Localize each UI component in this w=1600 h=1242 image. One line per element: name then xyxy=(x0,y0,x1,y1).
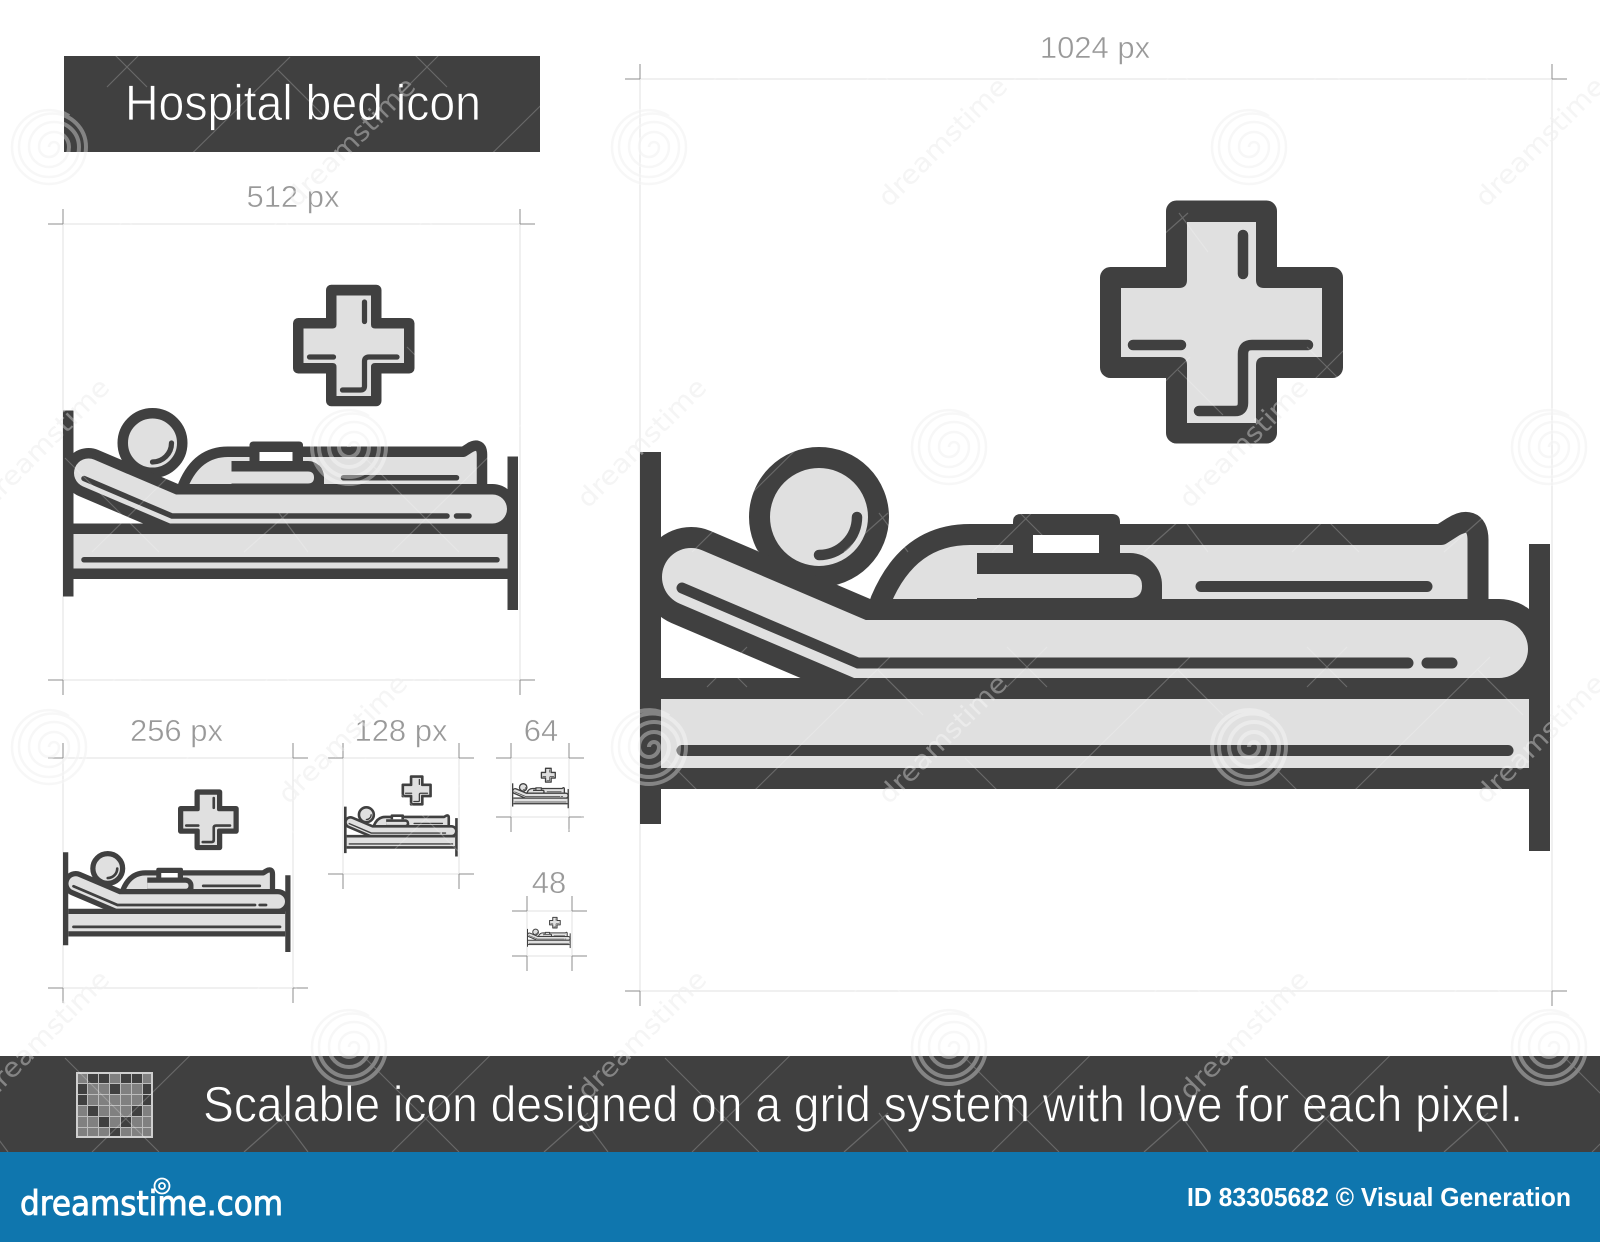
label: 256 px: 256 px xyxy=(130,713,224,748)
label: 48: 48 xyxy=(532,865,566,900)
icon: hospital bed 1024 px xyxy=(640,211,1550,851)
label: 1024 px: 1024 px xyxy=(1040,30,1151,65)
patient body on raised mattress xyxy=(682,577,1499,663)
size frame: 48 px xyxy=(512,896,587,971)
icon: pixel grid with heart xyxy=(76,1072,153,1138)
icon: hospital bed 512 px xyxy=(63,290,518,610)
size frame: 512 px xyxy=(48,209,535,695)
title bar: Hospital bed icon xyxy=(125,75,481,131)
folded arm and wrist tag xyxy=(977,514,1162,600)
footer band: grid system xyxy=(0,1056,1600,1152)
title bar xyxy=(64,56,540,152)
icon: hospital bed 48 px xyxy=(527,917,571,948)
cross xyxy=(1110,211,1332,433)
head xyxy=(760,458,878,576)
footer band: credit xyxy=(0,1152,1600,1242)
logo: dreamstime.com xyxy=(20,1184,283,1224)
size frame: 1024 px xyxy=(625,64,1567,1006)
size frame: 64 px xyxy=(496,743,584,832)
icon: hospital bed 64 px xyxy=(512,768,569,808)
label: 128 px: 128 px xyxy=(354,713,448,748)
icon: hospital bed 128 px xyxy=(344,776,458,856)
size frame: 256 px xyxy=(48,743,308,1003)
size frame: 128 px xyxy=(328,743,474,889)
blanket xyxy=(872,522,1478,625)
image credit: ID 83305682 © Visual Generation xyxy=(1187,1182,1571,1212)
label: 64: 64 xyxy=(524,713,558,748)
label: 512 px: 512 px xyxy=(246,179,340,214)
icon: hospital bed 256 px xyxy=(63,792,290,952)
bed frame xyxy=(640,452,1550,851)
tagline: Scalable icon designed on a grid system with love for each pixel. xyxy=(203,1076,1523,1132)
